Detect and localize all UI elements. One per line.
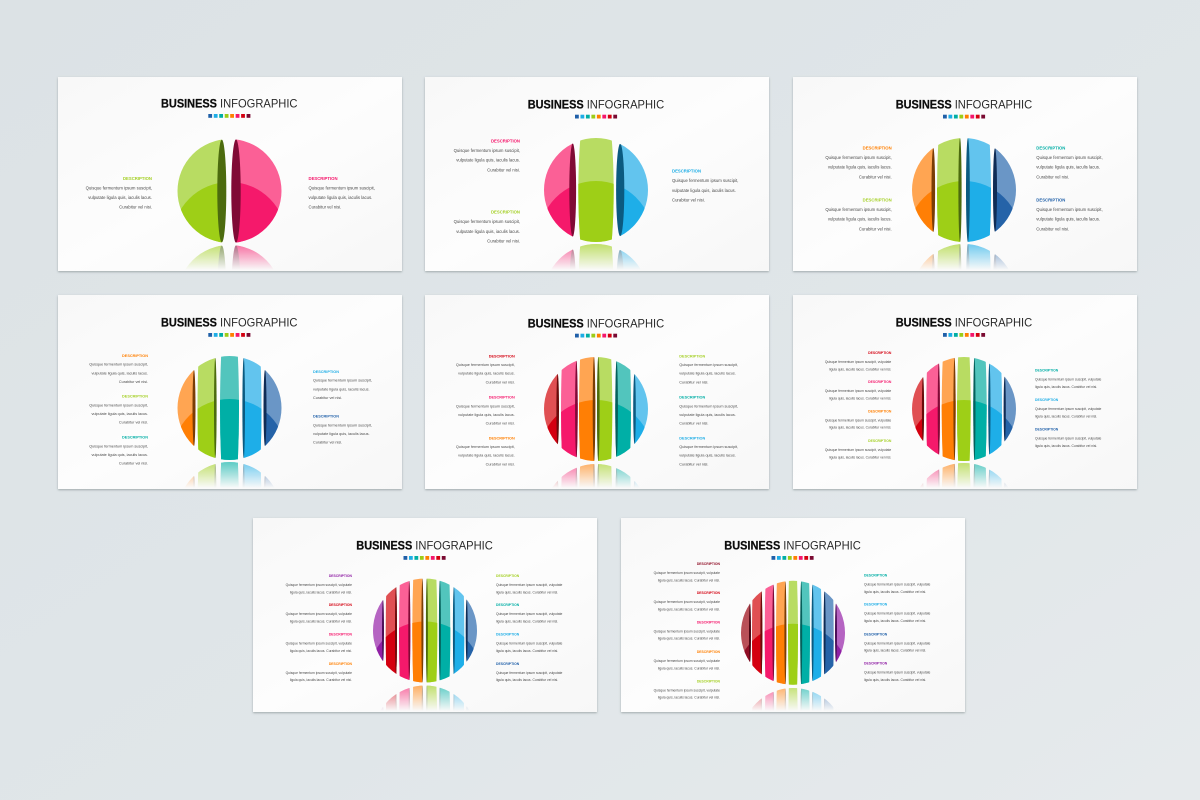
slice: blue — [633, 374, 648, 486]
text block: blue description — [313, 370, 372, 400]
text block: red description: Quisque fermentum ipsum suscipit, vulputate — [286, 612, 352, 616]
text block: pink description: Quisque fermentum ipsum suscipit, — [308, 186, 375, 190]
text block: dark blue description: ligula quis, iaculis lacus. Curabitur vel nisi. — [496, 678, 558, 682]
text block: dark blue description — [496, 662, 563, 682]
text block: purple description: ligula quis, iaculis lacus. Curabitur vel nisi. — [864, 678, 926, 682]
text block: green description: ligula quis, iaculis lacus. Curabitur vel nisi. — [496, 590, 558, 594]
text block: teal description — [1035, 369, 1102, 389]
colour squares — [208, 114, 250, 118]
text block: teal description: Quisque fermentum ipsum suscipit, vulputate — [864, 583, 931, 587]
text block: red description: ligula quis, iaculis lacus. Curabitur vel nisi. — [290, 620, 352, 624]
colour squares — [943, 333, 985, 337]
slice: teal — [973, 349, 987, 469]
text block: blue description: Quisque fermentum ipsum suscipit, vulputate — [1035, 407, 1102, 411]
slice: blue — [988, 349, 1002, 469]
text block: green description: Quisque fermentum ipsum suscipit, — [825, 207, 892, 212]
text block: teal description: ligula quis, iaculis lacus. Curabitur vel nisi. — [496, 620, 558, 624]
text block: teal description: DESCRIPTION — [679, 396, 706, 400]
text block: pink description: Quisque fermentum ipsum suscipit, vulputate — [286, 642, 352, 646]
chart: sliced circle — [912, 357, 1016, 461]
slice: red — [912, 377, 924, 486]
text block: green description: vulputate ligula quis, iaculis lacus. — [679, 372, 736, 376]
text block: orange description: DESCRIPTION — [489, 436, 515, 440]
text block: blue description: Curabitur vel nisi. — [672, 197, 705, 202]
chart: sliced circle — [733, 573, 853, 693]
slice: red — [544, 374, 559, 486]
panel: slide 5, six slices — [424, 295, 770, 492]
text block: dark blue description: Quisque fermentum ipsum suscipit, vulputate — [496, 671, 563, 675]
reflection — [552, 244, 640, 268]
text block: orange description: vulputate ligula quis, iaculis lacus. — [91, 371, 148, 375]
text block: orange description: DESCRIPTION — [863, 146, 892, 151]
panel: slide 7, eight slices — [253, 518, 597, 798]
title: BUSINESS — [528, 316, 584, 330]
text block: dark blue description: vulputate ligula quis, iaculis lacus. — [1036, 217, 1100, 222]
title: BUSINESS — [528, 97, 584, 111]
text block: red description: Quisque fermentum ipsum suscipit, vulputate — [654, 600, 720, 604]
text block: red description: DESCRIPTION — [329, 603, 353, 607]
text block: blue description: Curabitur vel nisi. — [679, 462, 708, 466]
text block: dark blue description — [313, 415, 372, 445]
text block: maroon description: ligula quis, iaculis lacus. Curabitur vel nisi. — [658, 578, 720, 582]
text block: pink description: vulputate ligula quis, iaculis lacus. — [458, 413, 515, 417]
text block: blue description: vulputate ligula quis, iaculis lacus. — [313, 387, 370, 391]
text block: maroon description: Quisque fermentum ipsum suscipit, vulputate — [654, 571, 720, 575]
text block: red description: Curabitur vel nisi. — [486, 380, 515, 384]
title: BUSINESS — [161, 316, 217, 330]
slice: green — [597, 349, 612, 469]
title: INFOGRAPHIC — [955, 316, 1033, 330]
text block: dark blue description: DESCRIPTION — [313, 415, 339, 419]
text block: red description: vulputate ligula quis, iaculis lacus. — [458, 372, 515, 376]
reflection — [365, 678, 485, 798]
text block: dark blue description: DESCRIPTION — [496, 662, 520, 666]
title: BUSINESS — [161, 97, 217, 111]
text block: blue description — [1035, 398, 1102, 418]
slice: teal — [439, 570, 450, 690]
text block: green description — [679, 354, 738, 384]
title: INFOGRAPHIC — [783, 539, 861, 553]
text block: pink description: DESCRIPTION — [329, 632, 353, 636]
text block: dark blue description: Curabitur vel nisi. — [313, 441, 342, 445]
text block: red description: DESCRIPTION — [489, 354, 515, 358]
text block: blue description — [496, 632, 563, 653]
text block: teal description: DESCRIPTION — [122, 436, 148, 440]
reflection — [186, 462, 273, 486]
text block: green description: Curabitur vel nisi. — [119, 421, 148, 425]
text block: blue description: Quisque fermentum ipsum suscipit, vulputate — [496, 642, 563, 646]
text block: teal description: Quisque fermentum ipsum suscipit, — [1036, 155, 1103, 160]
title — [528, 316, 665, 330]
text block: pink description — [454, 139, 520, 172]
slice: dark blue — [466, 570, 485, 690]
text block: teal description: Quisque fermentum ipsum suscipit, vulputate — [1035, 378, 1102, 382]
text block: teal description — [496, 603, 563, 624]
text block: red description: DESCRIPTION — [868, 351, 892, 355]
text block: orange description — [286, 662, 353, 682]
text block: green description: DESCRIPTION — [123, 176, 152, 181]
text block: teal description: Quisque fermentum ipsum suscipit, vulputate — [496, 612, 563, 616]
title: BUSINESS — [724, 539, 780, 553]
text block: orange description: Quisque fermentum ipsum suscipit, vulputate — [286, 671, 352, 675]
text block: pink description — [286, 632, 353, 653]
text block: dark blue description: DESCRIPTION — [1036, 198, 1065, 203]
text block: blue description: Quisque fermentum ipsum suscipit, vulputate — [864, 612, 931, 616]
text block: blue description: ligula quis, iaculis lacus. Curabitur vel nisi. — [496, 649, 558, 653]
text block: green description: Quisque fermentum ipsum suscipit, — [89, 403, 148, 407]
text block: pink description: ligula quis, iaculis lacus. Curabitur vel nisi. — [290, 649, 352, 653]
text block: red description — [654, 591, 721, 611]
slice: green — [957, 349, 971, 469]
text block: blue description: ligula quis, iaculis lacus. Curabitur vel nisi. — [1035, 414, 1097, 418]
slice: orange — [912, 148, 936, 268]
text block: orange description: vulputate ligula quis, iaculis lacus. — [458, 454, 515, 458]
title — [528, 97, 665, 111]
text block: pink description: Curabitur vel nisi. — [486, 422, 515, 426]
slice: pink — [926, 349, 940, 469]
text block: dark blue description — [1035, 428, 1102, 448]
text block: blue description: vulputate ligula quis, iaculis lacus. — [672, 188, 736, 193]
colour squares — [404, 556, 446, 560]
text block: purple description: Quisque fermentum ipsum suscipit, vulputate — [864, 671, 931, 675]
text block: pink description: Quisque fermentum ipsum suscipit, vulputate — [654, 629, 720, 633]
text block: orange description: DESCRIPTION — [329, 662, 353, 666]
text block: pink description: Curabitur vel nisi. — [487, 167, 520, 172]
text block: green description — [654, 679, 721, 700]
panel: slide 6, seven slices — [792, 294, 1138, 492]
text block: pink description: DESCRIPTION — [308, 176, 338, 181]
text block: teal description — [89, 436, 148, 466]
slice: dark blue — [264, 370, 282, 486]
text block: purple description — [864, 662, 931, 682]
slice: blue — [616, 144, 648, 268]
text block: green description: vulputate ligula quis, iaculis lacus. — [88, 195, 152, 200]
title: INFOGRAPHIC — [415, 539, 493, 553]
text block: blue description: DESCRIPTION — [672, 169, 701, 174]
text block: blue description — [672, 169, 738, 202]
text block: blue description: Quisque fermentum ipsum suscipit, — [679, 445, 738, 449]
text block: pink description: ligula quis, iaculis lacus. Curabitur vel nisi. — [658, 637, 720, 641]
text block: orange description: Quisque fermentum ipsum suscipit, — [456, 445, 515, 449]
slice: teal — [615, 349, 631, 469]
text block: orange description: Curabitur vel nisi. — [486, 462, 515, 466]
text block: purple description: ligula quis, iaculis lacus. Curabitur vel nisi. — [290, 590, 352, 594]
text block: teal description — [1036, 146, 1103, 179]
text block: purple description: Quisque fermentum ipsum suscipit, vulputate — [286, 583, 352, 587]
text block: pink description: DESCRIPTION — [489, 396, 515, 400]
chart: sliced circle — [178, 356, 282, 460]
text block: teal description: DESCRIPTION — [496, 603, 520, 607]
panel: slide 2, three slices — [424, 77, 770, 274]
reflection — [733, 680, 853, 800]
text block: teal description: Curabitur vel nisi. — [1036, 174, 1069, 179]
slice: green — [426, 570, 437, 690]
text block: green description: ligula quis, iaculis lacus. Curabitur vel nisi. — [658, 696, 720, 700]
slice: pink — [561, 349, 578, 469]
chart: sliced circle — [365, 570, 485, 690]
text block: green description: DESCRIPTION — [491, 210, 520, 215]
slice: pink — [399, 570, 410, 690]
colour squares — [575, 334, 617, 338]
text block: orange description: Quisque fermentum ipsum suscipit, — [89, 363, 148, 367]
text block: teal description — [864, 574, 931, 594]
title — [356, 539, 493, 553]
text block: orange description: Quisque fermentum ipsum suscipit, vulputate — [654, 659, 720, 663]
chart: sliced circle — [544, 138, 648, 242]
text block: orange description: Curabitur vel nisi. — [119, 380, 148, 384]
title — [724, 539, 861, 553]
text block: green description: Quisque fermentum ipsum suscipit, — [86, 186, 152, 190]
text block: purple description — [286, 574, 353, 594]
chart: sliced circle — [178, 140, 282, 242]
text block: teal description: ligula quis, iaculis lacus. Curabitur vel nisi. — [1035, 385, 1097, 389]
text block: green description: DESCRIPTION — [863, 198, 892, 203]
infographic sheet — [56, 76, 1138, 714]
text block: teal description: ligula quis, iaculis lacus. Curabitur vel nisi. — [864, 590, 926, 594]
text block: orange description: DESCRIPTION — [868, 409, 892, 413]
text block: orange description — [825, 146, 892, 179]
text block: green description — [89, 395, 148, 425]
text block: green description: vulputate ligula quis, iaculis lacus. — [456, 229, 520, 234]
text block: green description: DESCRIPTION — [496, 574, 520, 578]
text block: blue description: Quisque fermentum ipsum suscipit, — [313, 379, 372, 383]
slice: blue — [812, 573, 822, 693]
title: INFOGRAPHIC — [220, 97, 298, 111]
text block: green description: ligula quis, iaculis lacus. Curabitur vel nisi. — [829, 455, 891, 459]
text block: orange description — [825, 409, 892, 430]
slice: orange — [579, 349, 595, 469]
title — [161, 97, 298, 111]
slice: green — [198, 348, 217, 468]
slice: green — [170, 131, 226, 251]
text block: dark blue description: Curabitur vel nisi. — [1036, 226, 1069, 231]
text block: orange description: vulputate ligula quis, iaculis lacus. — [828, 165, 892, 170]
title: INFOGRAPHIC — [220, 316, 298, 330]
text block: pink description: Quisque fermentum ipsum suscipit, — [456, 404, 515, 408]
title: BUSINESS — [896, 316, 952, 330]
text block: green description: Quisque fermentum ipsum suscipit, — [679, 363, 738, 367]
panel: slide 4, five slices — [57, 295, 403, 491]
colour squares — [943, 115, 985, 118]
text block: blue description — [679, 436, 738, 466]
text block: green description: Curabitur vel nisi. — [119, 205, 152, 210]
reflection — [920, 244, 1008, 268]
text block: purple description: DESCRIPTION — [864, 662, 888, 666]
colour squares — [575, 115, 617, 118]
text block: green description — [496, 574, 563, 594]
text block: green description: DESCRIPTION — [122, 395, 148, 399]
text block: red description — [286, 603, 353, 624]
text block: blue description: DESCRIPTION — [864, 603, 888, 607]
text block: pink description — [654, 620, 721, 641]
slice: pink — [765, 573, 774, 693]
text block: dark blue description: DESCRIPTION — [1035, 428, 1059, 432]
title — [896, 316, 1033, 330]
text block: teal description: vulputate ligula quis, iaculis lacus. — [679, 413, 736, 417]
title: BUSINESS — [356, 539, 412, 553]
text block: blue description: DESCRIPTION — [679, 436, 706, 440]
text block: maroon description — [654, 562, 721, 582]
text block: green description — [454, 210, 520, 243]
text block: pink description: DESCRIPTION — [697, 620, 721, 624]
text block: pink description: vulputate ligula quis, iaculis lacus. — [456, 158, 520, 163]
text block: red description: Quisque fermentum ipsum suscipit, — [456, 363, 515, 367]
panel: slide 8, nine slices — [621, 518, 965, 800]
text block: pink description: vulputate ligula quis, iaculis lacus. — [308, 195, 372, 200]
slice: orange — [776, 573, 786, 693]
text block: red description — [456, 354, 515, 384]
slice: pink — [544, 144, 576, 268]
text block: pink description — [825, 380, 892, 400]
text block: dark blue description: Quisque fermentum ipsum suscipit, — [1036, 207, 1103, 212]
text block: blue description — [864, 603, 931, 623]
text block: pink description — [456, 396, 515, 426]
slice: blue — [453, 570, 464, 690]
text block: blue description: Curabitur vel nisi. — [313, 396, 342, 400]
text block: green description: DESCRIPTION — [697, 679, 721, 683]
text block: purple description: DESCRIPTION — [329, 574, 353, 578]
title: INFOGRAPHIC — [955, 97, 1033, 111]
text block: green description: Quisque fermentum ipsum suscipit, vulputate — [654, 688, 720, 692]
text block: dark blue description: ligula quis, iaculis lacus. Curabitur vel nisi. — [1035, 444, 1097, 448]
text block: teal description: DESCRIPTION — [864, 574, 888, 578]
text block: dark blue description — [1036, 198, 1103, 231]
slice: orange — [412, 570, 423, 690]
reflection — [920, 463, 1007, 486]
text block: teal description: DESCRIPTION — [1036, 146, 1065, 151]
text block: orange description: ligula quis, iaculis lacus. Curabitur vel nisi. — [829, 426, 891, 430]
text block: orange description: ligula quis, iaculis lacus. Curabitur vel nisi. — [290, 678, 352, 682]
slice: purple — [835, 573, 853, 693]
title — [896, 97, 1033, 111]
slice: orange — [178, 370, 196, 486]
slice: teal — [800, 573, 810, 693]
text block: red description: ligula quis, iaculis lacus. Curabitur vel nisi. — [658, 607, 720, 611]
title: BUSINESS — [896, 97, 952, 111]
reflection — [554, 464, 638, 486]
text block: blue description: vulputate ligula quis, iaculis lacus. — [679, 454, 736, 458]
slice: green — [788, 573, 798, 693]
text block: green description: vulputate ligula quis, iaculis lacus. — [828, 217, 892, 222]
slice: blue — [242, 348, 262, 468]
text block: dark blue description: vulputate ligula quis, iaculis lacus. — [313, 432, 370, 436]
slice: dark blue — [824, 573, 834, 693]
text block: green description — [86, 176, 152, 210]
text block: dark blue description: Quisque fermentum ipsum suscipit, — [313, 423, 372, 427]
text block: green description: Quisque fermentum ipsum suscipit, vulputate — [825, 448, 891, 452]
text block: orange description — [456, 436, 515, 466]
text block: orange description: ligula quis, iaculis lacus. Curabitur vel nisi. — [658, 666, 720, 670]
text block: orange description: Curabitur vel nisi. — [859, 174, 892, 179]
text block: red description — [825, 351, 892, 371]
text block: orange description: DESCRIPTION — [122, 354, 148, 358]
text block: pink description: Curabitur vel nisi. — [308, 205, 341, 210]
text block: orange description: DESCRIPTION — [697, 650, 721, 654]
text block: pink description: DESCRIPTION — [491, 139, 520, 144]
slice: dark blue — [993, 148, 1016, 268]
text block: teal description: Quisque fermentum ipsum suscipit, — [679, 404, 738, 408]
text block: green description — [825, 198, 892, 231]
text block: green description: DESCRIPTION — [679, 354, 706, 358]
text block: green description: Curabitur vel nisi. — [679, 380, 708, 384]
slice: orange — [942, 349, 956, 469]
text block: pink description: Quisque fermentum ipsum suscipit, — [454, 148, 520, 153]
text block: pink description — [308, 176, 375, 210]
text block: maroon description: DESCRIPTION — [697, 562, 721, 566]
slice: maroon — [733, 573, 751, 693]
slice: teal — [220, 348, 239, 468]
text block: teal description: vulputate ligula quis, iaculis lacus. — [91, 453, 148, 457]
text block: pink description: Quisque fermentum ipsum suscipit, vulputate — [825, 389, 891, 393]
text block: teal description: Quisque fermentum ipsum suscipit, — [89, 444, 148, 448]
text block: dark blue description: Quisque fermentum ipsum suscipit, vulputate — [1035, 437, 1102, 441]
colour squares — [208, 333, 250, 337]
slice: dark blue — [1004, 349, 1024, 469]
panel: slide 3, four slices — [792, 77, 1138, 274]
text block: blue description: Quisque fermentum ipsum suscipit, — [672, 178, 738, 183]
text block: green description: DESCRIPTION — [868, 439, 892, 443]
text block: orange description: Quisque fermentum ipsum suscipit, vulputate — [825, 418, 891, 422]
text block: orange description: Quisque fermentum ipsum suscipit, — [825, 155, 892, 160]
text block: dark blue description: Quisque fermentum ipsum suscipit, vulputate — [864, 641, 931, 645]
title: INFOGRAPHIC — [587, 97, 665, 111]
text block: red description: ligula quis, iaculis lacus. Curabitur vel nisi. — [829, 367, 891, 371]
panel: slide 1, two slices — [57, 77, 403, 273]
slice: pink — [231, 131, 288, 251]
slice: red — [752, 573, 762, 693]
text block: dark blue description: DESCRIPTION — [864, 632, 888, 636]
slice: blue — [966, 130, 991, 250]
text block: green description: Quisque fermentum ipsum suscipit, — [454, 219, 520, 224]
text block: green description: Curabitur vel nisi. — [859, 226, 892, 231]
text block: green description: vulputate ligula quis, iaculis lacus. — [91, 412, 148, 416]
colour squares — [772, 556, 814, 560]
text block: orange description — [89, 354, 148, 384]
chart: sliced circle — [912, 138, 1016, 242]
text block: blue description: DESCRIPTION — [1035, 398, 1059, 402]
text block: dark blue description: ligula quis, iaculis lacus. Curabitur vel nisi. — [864, 649, 926, 653]
text block: teal description: Curabitur vel nisi. — [679, 422, 708, 426]
slice: purple — [365, 570, 384, 690]
text block: green description — [825, 439, 892, 459]
text block: teal description: DESCRIPTION — [1035, 369, 1059, 373]
text block: red description: Quisque fermentum ipsum suscipit, vulputate — [825, 360, 891, 364]
slice: green — [578, 130, 614, 250]
title — [161, 316, 298, 330]
text block: pink description: ligula quis, iaculis lacus. Curabitur vel nisi. — [829, 396, 891, 400]
slice: red — [386, 570, 397, 690]
text block: dark blue description — [864, 632, 931, 653]
title: INFOGRAPHIC — [587, 316, 665, 330]
text block: pink description: DESCRIPTION — [868, 380, 892, 384]
text block: blue description: DESCRIPTION — [496, 632, 520, 636]
chart: sliced circle — [544, 357, 648, 461]
slice: green — [937, 130, 962, 250]
text block: orange description — [654, 650, 721, 670]
reflection — [186, 246, 272, 268]
text block: red description: DESCRIPTION — [697, 591, 721, 595]
text block: blue description: DESCRIPTION — [313, 370, 339, 374]
text block: green description: Curabitur vel nisi. — [487, 238, 520, 243]
text block: teal description: Curabitur vel nisi. — [119, 462, 148, 466]
text block: blue description: ligula quis, iaculis lacus. Curabitur vel nisi. — [864, 619, 926, 623]
text block: teal description: vulputate ligula quis, iaculis lacus. — [1036, 165, 1100, 170]
text block: teal description — [679, 396, 738, 426]
text block: green description: Quisque fermentum ipsum suscipit, vulputate — [496, 583, 563, 587]
